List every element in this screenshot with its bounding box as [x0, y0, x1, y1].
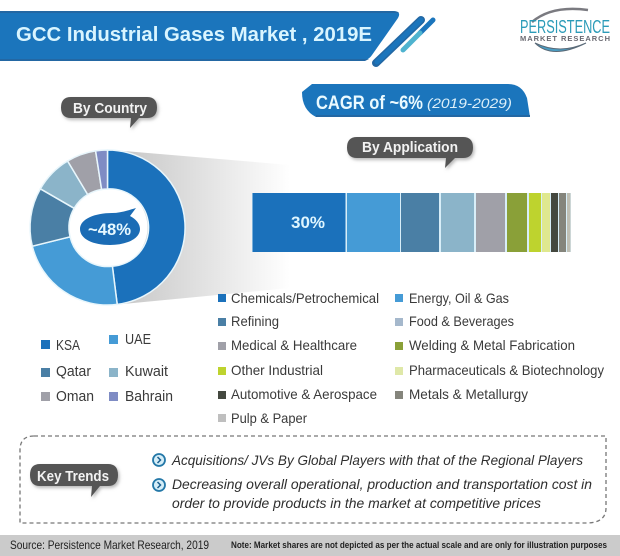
CAGR banner	[302, 84, 530, 117]
application legend: Medical & Healthcare	[231, 337, 357, 353]
logo	[520, 9, 610, 52]
application legend: Welding & Metal Fabrication	[409, 337, 575, 353]
segment: Qatar	[30, 189, 74, 246]
funnel connector	[112, 150, 290, 305]
trend text 1: Acquisitions/ JVs By Global Players with that of the Regional Players	[171, 452, 583, 468]
source: Source: Persistence Market Research, 2019	[10, 538, 209, 552]
By Country tag: By Country	[73, 101, 147, 117]
application legend: Food & Beverages	[409, 313, 514, 329]
country legend	[41, 331, 173, 405]
application legend: Other Industrial	[231, 362, 323, 378]
application legend	[218, 290, 604, 426]
country legend: Oman	[56, 389, 94, 405]
icon: arrow bullet 1	[153, 454, 165, 466]
Key Trends tag: Key Trends	[37, 469, 109, 485]
By Application tag: By Application	[362, 140, 458, 156]
trend text 2: order to provide products in the market at competitive prices	[172, 495, 541, 511]
country legend: UAE	[125, 331, 151, 348]
segment: KSA 48%	[108, 150, 185, 304]
trend text 2	[172, 476, 592, 511]
application legend: Pulp & Paper	[231, 410, 307, 426]
segment: Bahrain	[96, 150, 108, 190]
By Application tag	[347, 137, 473, 168]
panel: key trends	[20, 436, 606, 523]
country legend: Qatar	[56, 364, 91, 380]
By Country tag	[61, 97, 157, 128]
application legend: Pharmaceuticals & Biotechnology	[409, 362, 604, 378]
donut hole	[68, 188, 148, 268]
stacked bar: by application	[252, 193, 571, 252]
footer bar	[0, 535, 620, 556]
Key Trends tag	[30, 464, 118, 497]
country legend: Kuwait	[125, 364, 168, 380]
bar label: 30%: 30%	[291, 213, 325, 232]
donut callout: ~48%	[80, 208, 140, 245]
logo: MARKET RESEARCH	[520, 34, 610, 43]
CAGR period: (2019-2029)	[427, 95, 512, 111]
segment: Oman	[68, 151, 102, 194]
application legend: Energy, Oil & Gas	[409, 290, 509, 306]
application legend: Metals & Metallurgy	[409, 386, 528, 402]
donut callout: ~48%: ~48%	[88, 220, 131, 239]
banner stripes	[376, 20, 433, 63]
country legend: KSA	[56, 337, 80, 354]
segment: Kuwait	[40, 161, 88, 208]
trend text 2: Decreasing overall operational, production and transportation cost in	[172, 476, 592, 492]
CAGR text: CAGR of ~6%	[316, 93, 423, 114]
segment: UAE	[32, 237, 117, 305]
donut chart: by country	[30, 150, 185, 305]
country legend: Bahrain	[125, 389, 173, 405]
title text: GCC Industrial Gases Market , 2019E	[16, 24, 372, 46]
icon: arrow bullet 2	[153, 479, 165, 491]
application legend: Automotive & Aerospace	[231, 386, 377, 402]
title banner	[0, 11, 433, 63]
application legend: Refining	[231, 313, 279, 329]
application legend: Chemicals/Petrochemical	[231, 290, 379, 306]
